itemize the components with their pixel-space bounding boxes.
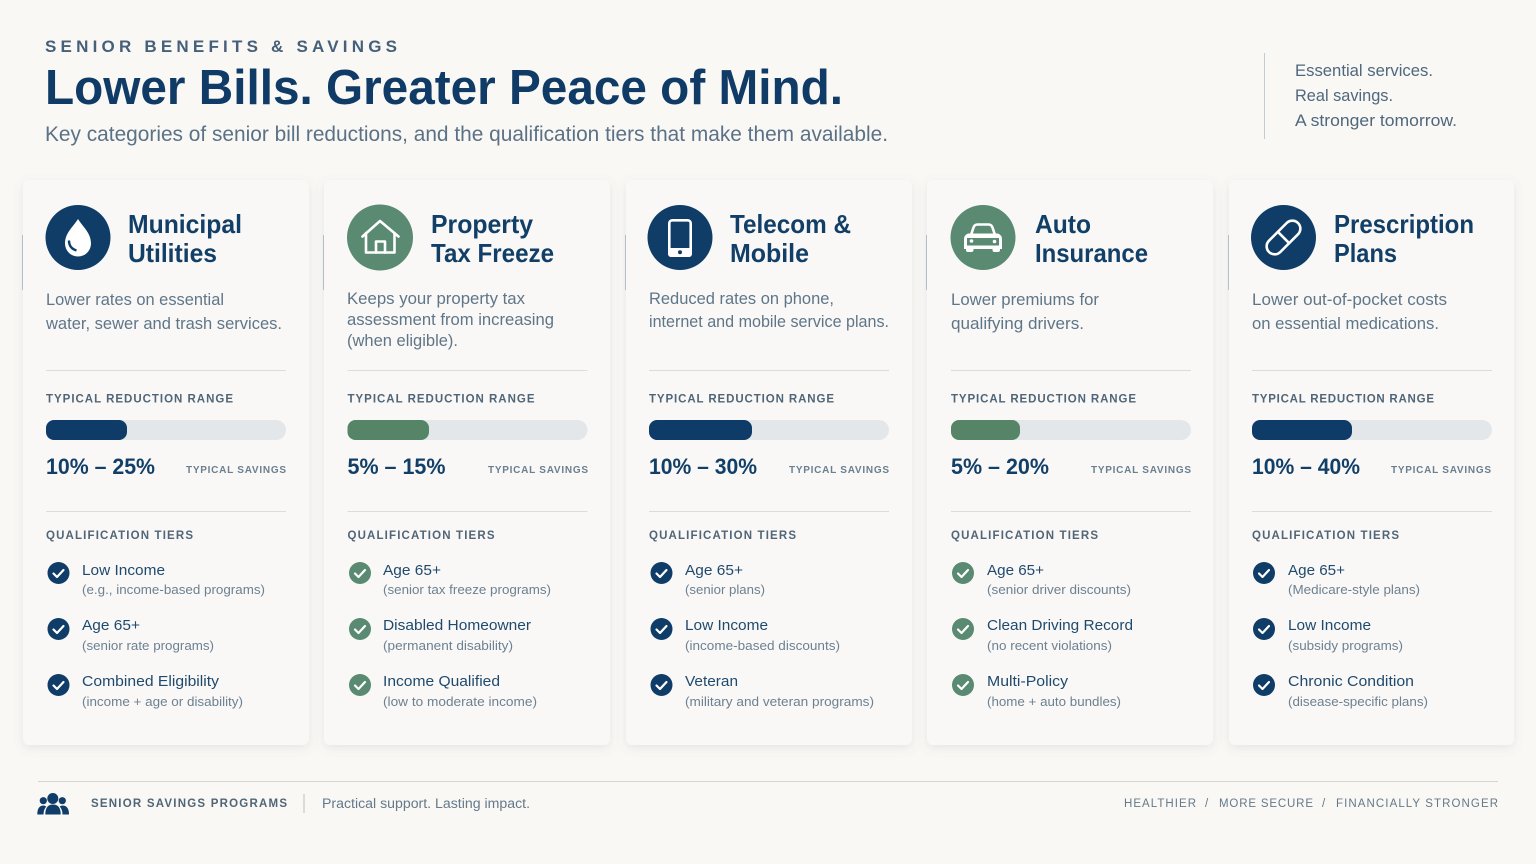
description: water, sewer and trash services.	[45, 315, 282, 333]
icon: pill capsule	[1251, 205, 1316, 270]
icon: car	[950, 205, 1016, 270]
tier 2: Low Income	[1288, 617, 1371, 634]
description: Lower rates on essential	[46, 291, 224, 309]
tier 3: (income + age or disability)	[82, 694, 243, 709]
icon: people group	[37, 793, 69, 814]
tier 3	[349, 673, 537, 709]
tier 1: Age 65+	[987, 562, 1044, 579]
description	[649, 290, 889, 331]
range bar	[1252, 420, 1492, 440]
description	[45, 291, 282, 333]
tier 3	[48, 673, 243, 709]
description: assessment from increasing	[347, 311, 554, 329]
tier 1	[650, 562, 765, 597]
reduction range label: TYPICAL REDUCTION RANGE	[348, 394, 535, 406]
description: Lower premiums for	[951, 291, 1100, 309]
footer right words: HEALTHIER	[1124, 798, 1196, 810]
panel: property tax freeze	[323, 180, 610, 745]
tier 2: Age 65+	[82, 617, 140, 634]
description: Reduced rates on phone,	[649, 290, 834, 308]
card heading: Property	[431, 209, 534, 239]
tier 3: (low to moderate income)	[383, 694, 537, 709]
description: on essential medications.	[1252, 315, 1439, 333]
tier 2	[1253, 617, 1403, 653]
tier 2: Clean Driving Record	[987, 617, 1133, 634]
card heading: Utilities	[128, 238, 217, 268]
panel: municipal utilities	[22, 180, 309, 745]
tier 1: (senior plans)	[685, 582, 765, 597]
tier 1: (senior tax freeze programs)	[383, 582, 551, 597]
qualification label: QUALIFICATION TIERS	[46, 530, 193, 542]
tagline: A stronger tomorrow.	[1295, 111, 1457, 130]
range value: 5% – 20%	[951, 454, 1049, 479]
card heading	[1334, 209, 1474, 268]
description: Lower out-of-pocket costs	[1252, 291, 1447, 309]
tier 1: Age 65+	[1288, 562, 1345, 579]
tier 2: (income-based discounts)	[685, 638, 840, 653]
qualification label: QUALIFICATION TIERS	[348, 530, 495, 542]
tier 3: Chronic Condition	[1288, 673, 1414, 690]
tier 2: Low Income	[685, 617, 768, 634]
footer right words: /	[1205, 798, 1209, 810]
footer right words: MORE SECURE	[1219, 798, 1313, 810]
range value: 10% – 30%	[649, 454, 757, 479]
reduction range label: TYPICAL REDUCTION RANGE	[951, 394, 1136, 406]
tier 1	[952, 562, 1131, 597]
range bar	[46, 420, 286, 440]
icon: smartphone	[648, 205, 712, 270]
range value: 10% – 25%	[46, 454, 155, 479]
tagline: Essential services.	[1295, 61, 1433, 80]
panel: auto insurance	[926, 180, 1213, 745]
tier 3: Multi-Policy	[987, 673, 1069, 690]
card heading: Mobile	[730, 238, 809, 268]
range bar	[649, 420, 889, 440]
tier 2: (senior rate programs)	[82, 638, 214, 653]
footer tagline: Practical support. Lasting impact.	[322, 796, 530, 811]
typical savings label: TYPICAL SAVINGS	[488, 465, 588, 476]
tier 2	[952, 617, 1133, 653]
card heading	[1035, 209, 1148, 268]
card heading: Prescription	[1334, 209, 1474, 239]
typical savings label: TYPICAL SAVINGS	[1091, 465, 1191, 476]
typical savings label: TYPICAL SAVINGS	[1391, 465, 1491, 476]
tier 1	[48, 562, 265, 597]
range bar	[348, 420, 588, 440]
description	[951, 291, 1100, 333]
tier 1: Age 65+	[383, 562, 441, 579]
subtitle: Key categories of senior bill reductions, and the qualification tiers that make them available.	[45, 123, 888, 146]
reduction range label: TYPICAL REDUCTION RANGE	[1252, 394, 1434, 406]
description: qualifying drivers.	[951, 315, 1084, 333]
tier 2: (no recent violations)	[987, 638, 1112, 653]
footer label: SENIOR SAVINGS PROGRAMS	[91, 798, 287, 810]
tier 1: (Medicare-style plans)	[1288, 582, 1420, 597]
card heading: Insurance	[1035, 238, 1148, 268]
tier 2: Disabled Homeowner	[383, 617, 531, 634]
range value: 5% – 15%	[348, 454, 446, 479]
tier 1: (e.g., income-based programs)	[82, 582, 265, 597]
tier 2	[650, 617, 840, 653]
description: internet and mobile service plans.	[649, 313, 889, 331]
card heading: Telecom &	[730, 209, 851, 239]
tier 3	[650, 673, 874, 709]
footer	[37, 781, 1498, 814]
card heading: Plans	[1334, 238, 1397, 268]
description: Keeps your property tax	[347, 290, 526, 308]
title: Lower Bills. Greater Peace of Mind.	[45, 61, 843, 115]
tier 2	[349, 617, 531, 653]
panel: telecom and mobile	[625, 180, 912, 745]
icon: house	[347, 204, 413, 270]
tier 3: Veteran	[685, 673, 738, 690]
tagline	[1264, 53, 1457, 139]
tagline: Real savings.	[1295, 86, 1393, 105]
description: (when eligible).	[347, 332, 458, 350]
typical savings label: TYPICAL SAVINGS	[789, 465, 889, 476]
eyebrow heading: SENIOR BENEFITS & SAVINGS	[45, 37, 397, 56]
tier 1	[1253, 562, 1420, 597]
card heading	[730, 209, 851, 268]
tier 3: Combined Eligibility	[82, 673, 220, 690]
tier 3: (home + auto bundles)	[987, 694, 1121, 709]
tier 2: (permanent disability)	[383, 638, 513, 653]
range bar	[951, 420, 1191, 440]
card heading	[431, 209, 554, 268]
card heading: Auto	[1035, 209, 1091, 239]
tier 2	[48, 617, 214, 653]
typical savings label: TYPICAL SAVINGS	[186, 465, 286, 476]
tier 1: (senior driver discounts)	[987, 582, 1131, 597]
reduction range label: TYPICAL REDUCTION RANGE	[649, 394, 834, 406]
qualification label: QUALIFICATION TIERS	[649, 530, 796, 542]
tier 2: (subsidy programs)	[1288, 638, 1403, 653]
tier 3: Income Qualified	[383, 673, 500, 690]
card heading: Tax Freeze	[431, 238, 554, 268]
tier 3	[1253, 673, 1428, 709]
qualification label: QUALIFICATION TIERS	[1252, 530, 1399, 542]
footer right words: /	[1322, 798, 1326, 810]
tier 3: (military and veteran programs)	[685, 694, 874, 709]
range value: 10% – 40%	[1252, 454, 1360, 479]
footer right words: FINANCIALLY STRONGER	[1336, 798, 1498, 810]
qualification label: QUALIFICATION TIERS	[951, 530, 1098, 542]
header	[45, 37, 888, 146]
tier 1	[349, 562, 551, 597]
card heading: Municipal	[128, 209, 242, 239]
card heading	[128, 209, 242, 268]
footer right words	[1124, 798, 1498, 810]
description	[1252, 291, 1447, 333]
description	[347, 290, 554, 350]
reduction range label: TYPICAL REDUCTION RANGE	[46, 394, 233, 406]
icon: water drop	[46, 205, 110, 270]
panel: prescription plans	[1228, 180, 1514, 745]
tier 1: Age 65+	[685, 562, 743, 579]
tier 3: (disease-specific plans)	[1288, 694, 1428, 709]
tier 1: Low Income	[82, 562, 165, 579]
tier 3	[952, 673, 1121, 709]
